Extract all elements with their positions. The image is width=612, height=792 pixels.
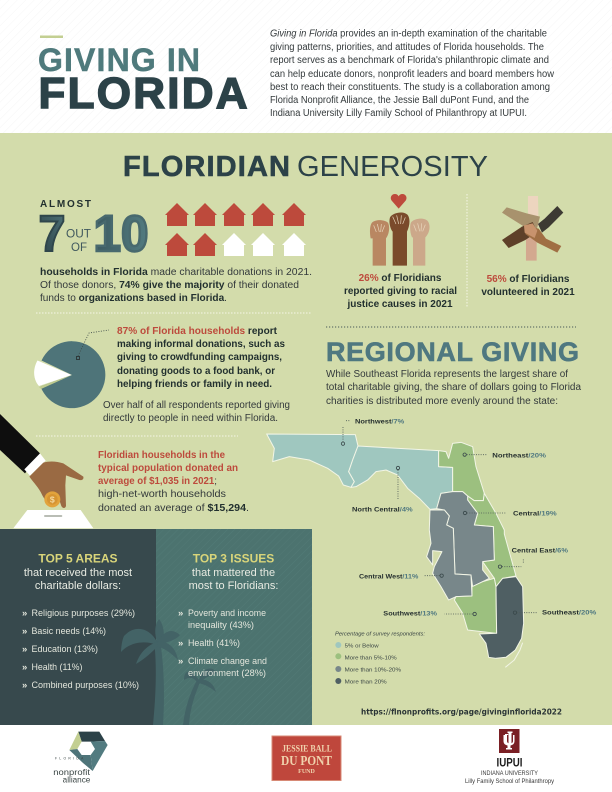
map labels and markers xyxy=(341,419,596,617)
text: regional intro: charities is distributed more evenly around the state: xyxy=(326,396,558,407)
panel: top 3 issues xyxy=(178,552,278,679)
link: https://flnonprofits.org/page/givinginflorida2022 xyxy=(361,708,562,716)
legend: More than 20% xyxy=(345,680,387,686)
panel: top 5 areas: Health (11%) xyxy=(32,662,82,673)
logo: IUPUI: IUPUI xyxy=(496,756,522,770)
panel: top 3 issues: Poverty and income xyxy=(188,608,266,619)
logo: IUPUI xyxy=(465,729,555,785)
map labels and markers: Southwest/13% xyxy=(383,610,437,617)
logo: Jessie Ball duPont Fund xyxy=(272,736,341,780)
text: average donations xyxy=(98,450,249,514)
panel: top 5 areas: » xyxy=(22,626,27,637)
panel: top 3 issues: that mattered the xyxy=(192,567,275,579)
icon: hand dropping coin in box xyxy=(0,414,93,528)
panel: top 5 areas: Religious purposes (29%) xyxy=(32,608,135,619)
intro text xyxy=(270,29,555,119)
text: informal donations: making informal donations, such as xyxy=(117,339,285,350)
map labels and markers: Central/19% xyxy=(513,510,557,517)
intro text: report serves as a benchmark of Florida's philanthropic climate and xyxy=(270,55,549,66)
map labels and markers: North Central /4% xyxy=(352,507,413,514)
panel: top 5 areas: » xyxy=(22,662,27,673)
stat: almost 7 out of 10: OUT xyxy=(66,226,92,240)
map labels and markers: Southeast/20% xyxy=(542,609,596,616)
text: average donations: typical population donated an xyxy=(98,463,238,474)
panel: top 3 issues: » xyxy=(178,656,183,667)
panel: top 5 areas: TOP 5 AREAS xyxy=(38,552,118,566)
text: informal donations xyxy=(117,326,285,390)
stat: almost 7 out of 10: 7 xyxy=(38,205,66,262)
panel: top 5 areas xyxy=(22,552,139,691)
title xyxy=(38,36,248,118)
icon: raised fists and heart xyxy=(370,194,430,266)
stat: almost 7 out of 10: 10 xyxy=(94,205,148,262)
stat: volunteered: 56% of Floridians xyxy=(487,274,570,285)
panel: top 5 areas: » xyxy=(22,680,27,691)
map labels and markers: Northwest/7% xyxy=(355,419,404,426)
stat: almost 7 out of 10: ALMOST xyxy=(40,199,91,210)
stat: almost 7 out of 10: OF xyxy=(71,240,87,254)
stat: volunteered: volunteered in 2021 xyxy=(481,287,575,298)
icon: stacked hands xyxy=(502,196,563,261)
region: Central East xyxy=(468,493,516,587)
intro text: can help educate donors, nonprofit leaders and board members how xyxy=(270,69,555,80)
logo: Florida Nonprofit Alliance: alliance xyxy=(63,774,91,784)
region: Southeast xyxy=(479,577,524,658)
panel: top 3 issues: environment (28%) xyxy=(188,668,266,679)
panel: top 5 areas: that received the most xyxy=(24,567,132,579)
panel: top 3 issues: Climate change and xyxy=(188,656,267,667)
intro text: giving patterns, priorities, and attitudes of Florida households. The xyxy=(270,42,544,53)
intro text: Florida Nonprofit Alliance, the Jessie Ball duPont Fund, and the xyxy=(270,95,529,106)
title: GIVING IN xyxy=(38,42,200,78)
legend xyxy=(335,631,425,686)
panel: top 5 areas: Basic needs (14%) xyxy=(32,626,106,637)
logo: Jessie Ball duPont Fund: JESSIE BALL xyxy=(282,744,332,754)
logo: Jessie Ball duPont Fund: DU PONT xyxy=(281,754,333,769)
text: average donations: average of $1,035 in 2021; xyxy=(98,476,217,487)
icon: hand dropping coin in box: $ xyxy=(50,494,55,504)
logo: IUPUI: INDIANA UNIVERSITY xyxy=(481,770,539,777)
intro text: Giving in Florida provides an in-depth examination of the charitable xyxy=(270,29,547,40)
households text xyxy=(40,267,312,304)
icon: ten houses xyxy=(165,203,306,256)
legend: Percentage of survey respondents: xyxy=(335,631,425,637)
text: regional intro: While Southeast Florida represents the largest share of xyxy=(326,369,568,380)
map labels and markers: Central West/11% xyxy=(359,573,418,580)
panel: top 5 areas: » xyxy=(22,644,27,655)
region: Central xyxy=(437,492,494,587)
heading: regional giving: REGIONAL GIVING xyxy=(326,337,579,367)
logo: Florida Nonprofit Alliance: FLORIDA xyxy=(55,757,84,761)
legend: More than 5%-10% xyxy=(345,655,397,661)
heading: Floridian Generosity: GENEROSITY xyxy=(297,151,488,183)
panels background with palm trees xyxy=(0,529,312,725)
households text: funds to organizations based in Florida. xyxy=(40,293,227,304)
text: average donations: donated an average of $15,294. xyxy=(98,503,249,514)
stat: racial justice: justice causes in 2021 xyxy=(346,299,453,310)
text: over half: directly to people in need within Florida. xyxy=(103,413,278,424)
stat: volunteered xyxy=(481,274,575,298)
text: regional intro xyxy=(326,369,581,407)
region: Southwest xyxy=(454,578,497,633)
stat: racial justice xyxy=(344,273,457,310)
stat: racial justice: reported giving to racial xyxy=(344,286,457,297)
region: Northwest xyxy=(267,434,358,487)
text: informal donations: giving to crowdfunding campaigns, xyxy=(117,352,282,363)
text: over half: Over half of all respondents reported giving xyxy=(103,400,290,411)
panel: top 5 areas: Combined purposes (10%) xyxy=(32,680,139,691)
panel: top 3 issues: » xyxy=(178,638,183,649)
logo: Florida Nonprofit Alliance: nonprofit xyxy=(53,767,91,777)
heading: Floridian Generosity: FLORIDIAN xyxy=(123,151,290,183)
heading: Floridian Generosity xyxy=(123,151,488,183)
logo: IUPUI: Lilly Family School of Philanthropy xyxy=(465,778,555,785)
intro text: best to reach their constituents. The study is a collaboration among xyxy=(270,82,550,93)
map: Florida regions xyxy=(267,434,524,667)
legend: 5% or Below xyxy=(345,643,380,649)
legend: More than 10%-20% xyxy=(345,667,401,673)
title: FLORIDA xyxy=(38,69,248,118)
chart: pie 87% xyxy=(34,330,109,408)
text: average donations: Floridian households in the xyxy=(98,450,225,461)
text: average donations: high-net-worth households xyxy=(98,489,226,500)
panel: top 3 issues: inequality (43%) xyxy=(188,620,254,631)
text: informal donations: helping friends or family in need. xyxy=(117,379,272,390)
stat: racial justice: 26% of Floridians xyxy=(359,273,442,284)
map labels and markers: Central East/6% xyxy=(512,547,568,554)
header background xyxy=(0,0,612,133)
map labels and markers: Northeast/20% xyxy=(492,452,546,459)
logo: Jessie Ball duPont Fund: FUND xyxy=(298,769,315,775)
region: Central West xyxy=(427,510,472,600)
households text: households in Florida made charitable donations in 2021. xyxy=(40,267,312,278)
text: informal donations: donating goods to a food bank, or xyxy=(117,366,275,377)
panel: top 3 issues: most to Floridians: xyxy=(189,580,278,592)
logo: Florida Nonprofit Alliance xyxy=(53,732,108,784)
region: North Central xyxy=(349,446,453,509)
panel: top 5 areas: charitable dollars: xyxy=(35,580,121,592)
text: regional intro: total charitable giving, the share of dollars going to Florida xyxy=(326,382,581,393)
green background panel xyxy=(0,133,612,725)
intro text: Indiana University Lilly Family School of Philanthropy at IUPUI. xyxy=(270,108,527,119)
panel: top 5 areas: Education (13%) xyxy=(32,644,98,655)
households text: Of those donors, 74% give the majority of their donated xyxy=(40,280,299,291)
panel: top 3 issues: » xyxy=(178,608,183,619)
stat: almost 7 out of 10 xyxy=(38,199,148,262)
panel: top 3 issues: Health (41%) xyxy=(188,638,240,649)
text: informal donations: 87% of Florida households report xyxy=(117,326,278,337)
text: over half xyxy=(103,400,290,424)
region: Northeast xyxy=(439,442,484,501)
panel: top 3 issues: TOP 3 ISSUES xyxy=(193,552,274,566)
panel: top 5 areas: » xyxy=(22,608,27,619)
